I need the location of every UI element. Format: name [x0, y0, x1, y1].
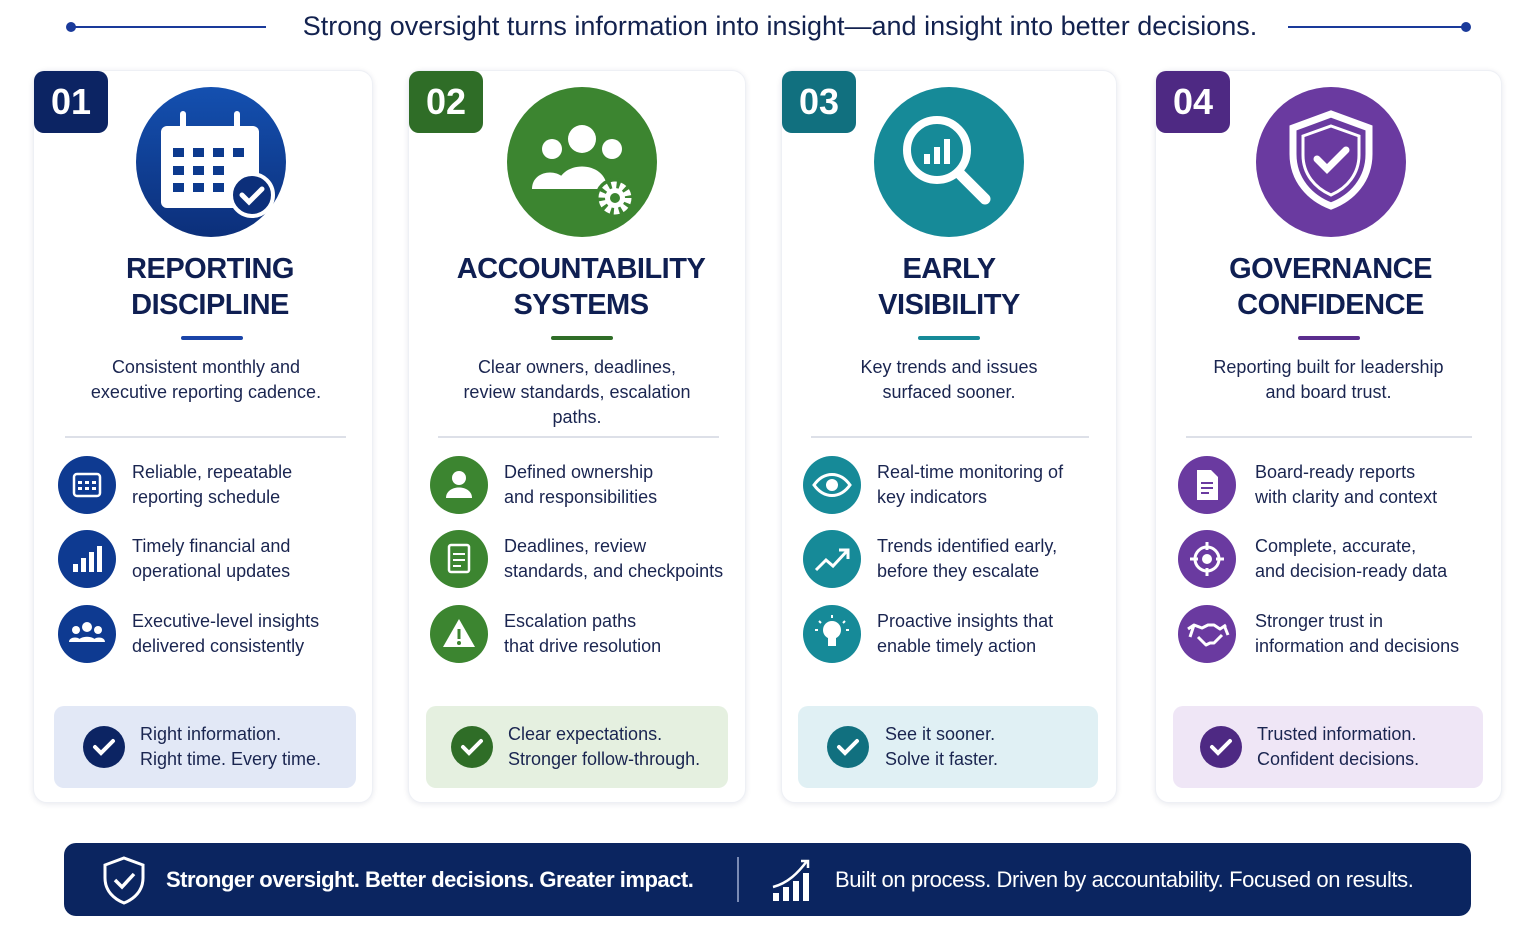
description: paths.	[552, 407, 602, 427]
bottom banner	[64, 843, 1471, 916]
item: monitoring: key indicators	[877, 487, 987, 507]
banner text right: Built on process. Driven by accountability. Focused on results.	[835, 867, 1413, 892]
item: trust	[1178, 605, 1459, 663]
callout: Trusted information.	[1257, 724, 1416, 744]
title	[878, 253, 1020, 321]
title	[457, 253, 706, 321]
description	[1213, 357, 1444, 402]
item: ownership: Defined ownership	[504, 462, 653, 482]
badge 03	[782, 71, 856, 133]
title: SYSTEMS	[513, 289, 649, 321]
item: escalation	[430, 605, 661, 663]
description: Clear owners, deadlines,	[478, 357, 676, 377]
panel: governance confidence	[1155, 70, 1502, 803]
item: deadlines: standards, and checkpoints	[504, 561, 723, 581]
panel: reporting discipline	[33, 70, 373, 803]
icon: shield	[1256, 87, 1406, 237]
callout: See it sooner.	[885, 724, 995, 744]
item: proactive: Proactive insights that	[877, 611, 1053, 631]
item: monitoring	[803, 456, 1064, 514]
callout	[426, 706, 728, 788]
description: Key trends and issues	[860, 357, 1038, 377]
callout: Right time. Every time.	[140, 749, 321, 769]
item: data: Complete, accurate,	[1255, 536, 1416, 556]
item: updates: Timely financial and	[132, 536, 290, 556]
badge 04: 04	[1173, 81, 1213, 122]
title: ACCOUNTABILITY	[457, 253, 705, 285]
header: tagline: Strong oversight turns information into insight—and insight into better decisions.	[303, 11, 1257, 41]
badge 03: 03	[799, 81, 839, 122]
item: reports: with clarity and context	[1255, 487, 1437, 507]
item: trust: Stronger trust in	[1255, 611, 1383, 631]
item: reports	[1178, 456, 1437, 514]
item: schedule: reporting schedule	[132, 487, 280, 507]
callout	[798, 706, 1098, 788]
callout	[1173, 706, 1483, 788]
badge 01	[34, 71, 108, 133]
callout: Stronger follow-through.	[508, 749, 700, 769]
item: trust: information and decisions	[1255, 636, 1459, 656]
description: Consistent monthly and	[112, 357, 300, 377]
item: ownership: and responsibilities	[504, 487, 657, 507]
description: executive reporting cadence.	[91, 382, 321, 402]
icon: shield check	[104, 856, 144, 905]
item: insights: delivered consistently	[132, 636, 304, 656]
item: insights	[58, 605, 319, 663]
item: schedule	[58, 456, 292, 514]
item: proactive: enable timely action	[877, 636, 1036, 656]
description: and board trust.	[1265, 382, 1392, 402]
panel: early visibility	[781, 70, 1117, 803]
item: data	[1178, 530, 1448, 588]
item: insights: Executive-level insights	[132, 611, 319, 631]
title: EARLY	[902, 253, 996, 285]
icon: team gear	[507, 87, 657, 237]
item: data: and decision-ready data	[1255, 561, 1447, 581]
item: deadlines	[430, 530, 723, 588]
item: escalation: that drive resolution	[504, 636, 661, 656]
title: CONFIDENCE	[1237, 289, 1424, 321]
badge 01: 01	[51, 81, 91, 122]
icon: growth chart	[772, 860, 810, 901]
icon: calendar	[136, 87, 286, 237]
description	[860, 357, 1038, 402]
banner text left: Stronger oversight. Better decisions. Greater impact.	[166, 867, 693, 892]
item: reports: Board-ready reports	[1255, 462, 1415, 482]
title: VISIBILITY	[878, 289, 1020, 321]
icon: magnifier chart	[874, 87, 1024, 237]
item: trends: before they escalate	[877, 561, 1039, 581]
callout: Right information.	[140, 724, 281, 744]
title	[126, 253, 294, 321]
callout: Confident decisions.	[1257, 749, 1419, 769]
callout	[54, 706, 356, 788]
title	[1229, 253, 1432, 321]
item: deadlines: Deadlines, review	[504, 536, 646, 556]
badge 04	[1156, 71, 1230, 133]
callout: Solve it faster.	[885, 749, 998, 769]
description	[91, 357, 321, 402]
description: Reporting built for leadership	[1213, 357, 1444, 377]
item: schedule: Reliable, repeatable	[132, 462, 292, 482]
badge 02: 02	[426, 81, 466, 122]
item: updates	[58, 530, 290, 588]
item: proactive	[803, 605, 1053, 663]
description: surfaced sooner.	[882, 382, 1016, 402]
title: REPORTING	[126, 253, 294, 285]
item: escalation: Escalation paths	[504, 611, 636, 631]
badge 02	[409, 71, 483, 133]
callout: Clear expectations.	[508, 724, 662, 744]
item: ownership	[430, 456, 657, 514]
item: updates: operational updates	[132, 561, 290, 581]
panel: accountability systems	[408, 70, 746, 803]
header: tagline	[66, 11, 1471, 41]
item: monitoring: Real-time monitoring of	[877, 462, 1063, 482]
item: trends	[803, 530, 1057, 588]
description	[463, 357, 691, 427]
item: trends: Trends identified early,	[877, 536, 1057, 556]
description: review standards, escalation	[463, 382, 691, 402]
title: DISCIPLINE	[131, 289, 289, 321]
title: GOVERNANCE	[1229, 253, 1432, 285]
